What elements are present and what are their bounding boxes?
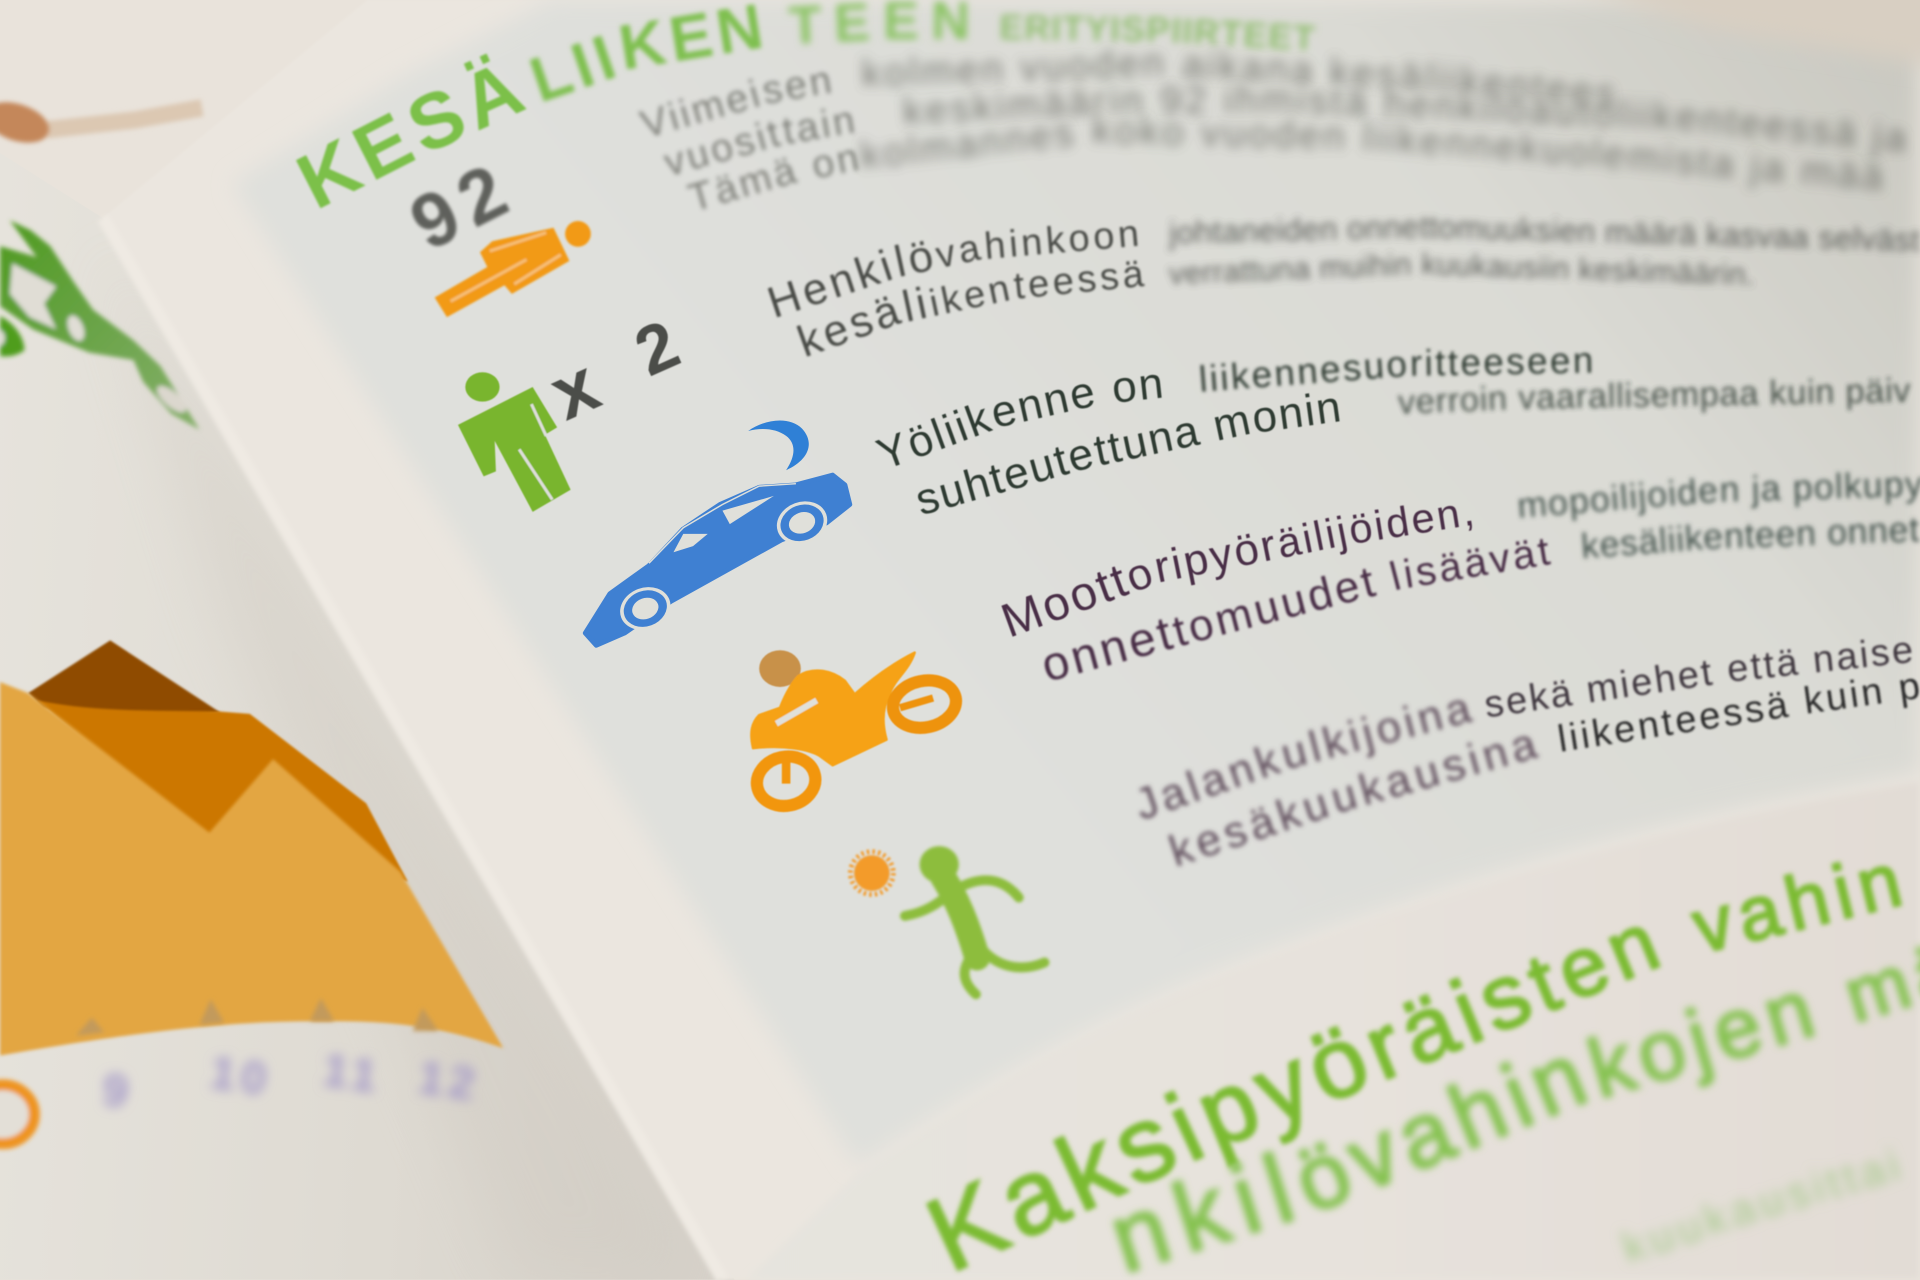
stat: x 2: x <box>538 342 611 437</box>
icon: green walking person <box>905 846 1044 994</box>
panel: lower cream area <box>747 781 1920 1280</box>
rider arm gap <box>776 700 817 724</box>
chart layer: front area <box>0 682 503 1056</box>
text block: intro paragraph: Viimeisen <box>636 70 833 138</box>
page shadow near gutter <box>103 245 686 1280</box>
chart: monthly area chart on left page <box>0 640 503 1144</box>
icon: sun <box>850 852 893 894</box>
chart axis labels: 12 <box>415 1051 483 1111</box>
text block: motorcyclists: onnettomuudet lisäävät <box>1036 527 1556 693</box>
chart axis labels: 9 <box>99 1063 132 1118</box>
icon: orange person lying <box>435 221 591 317</box>
title: ERITYISPIIRTEET <box>996 10 1318 54</box>
text block: injury accidents: verrattuna muihin kuukausiin keskimäärin. <box>1168 247 1755 292</box>
rider helmet <box>759 650 801 687</box>
title: KESÄ <box>295 52 528 210</box>
text block: motorcyclists: Moottoripyöräilijöiden, <box>995 487 1479 648</box>
chart marker ring <box>0 1085 34 1144</box>
chart layer: dark back area <box>28 640 220 722</box>
icon: crescent moon <box>748 421 809 470</box>
chart axis labels <box>99 1043 483 1118</box>
motorcycle body and rider <box>751 653 915 765</box>
text block: pedestrians: Jalankulkijoina <box>1129 682 1480 830</box>
text block: injury accidents: Henkilövahinkoon <box>766 224 1139 318</box>
text block: pedestrians: kesäkuukausina <box>1163 718 1546 876</box>
car window front <box>673 534 708 552</box>
rear wheel <box>889 675 960 733</box>
text block: intro paragraph: vuosittain <box>662 107 856 176</box>
illustration: green plant on left page <box>0 220 200 430</box>
car window rear <box>722 496 774 524</box>
front wheel <box>752 751 820 811</box>
stat: x 2 <box>538 305 690 437</box>
chart tick marks <box>76 998 438 1036</box>
left page <box>0 153 735 1280</box>
text block: injury accidents: kesäliikenteessä <box>796 259 1146 358</box>
gutter fold highlight <box>103 218 722 1280</box>
stat: x 2: 2 <box>624 305 690 391</box>
ribbon bookmark <box>0 95 202 150</box>
panel top-right beige glow <box>1469 0 1920 73</box>
icon: blue car <box>585 475 850 645</box>
icon: motorcycle rider <box>751 650 960 811</box>
car windscreen line <box>649 484 796 563</box>
car front wheel <box>614 580 677 637</box>
title <box>284 0 1317 226</box>
chart layer: middle area <box>37 700 408 882</box>
icon: green person standing <box>458 372 571 512</box>
text block: night traffic: liikennesuoritteeseen <box>1197 340 1596 400</box>
chart axis labels: 10 <box>207 1046 275 1106</box>
chart axis labels: 11 <box>319 1043 385 1103</box>
stat: 92: 92 <box>398 144 529 267</box>
car rear wheel <box>771 495 833 551</box>
text block: night traffic: Yöliikenne on <box>871 358 1168 480</box>
text block: intro paragraph: Tämä on <box>684 148 860 211</box>
text block: night traffic: suhteutettuna monin <box>910 382 1346 525</box>
